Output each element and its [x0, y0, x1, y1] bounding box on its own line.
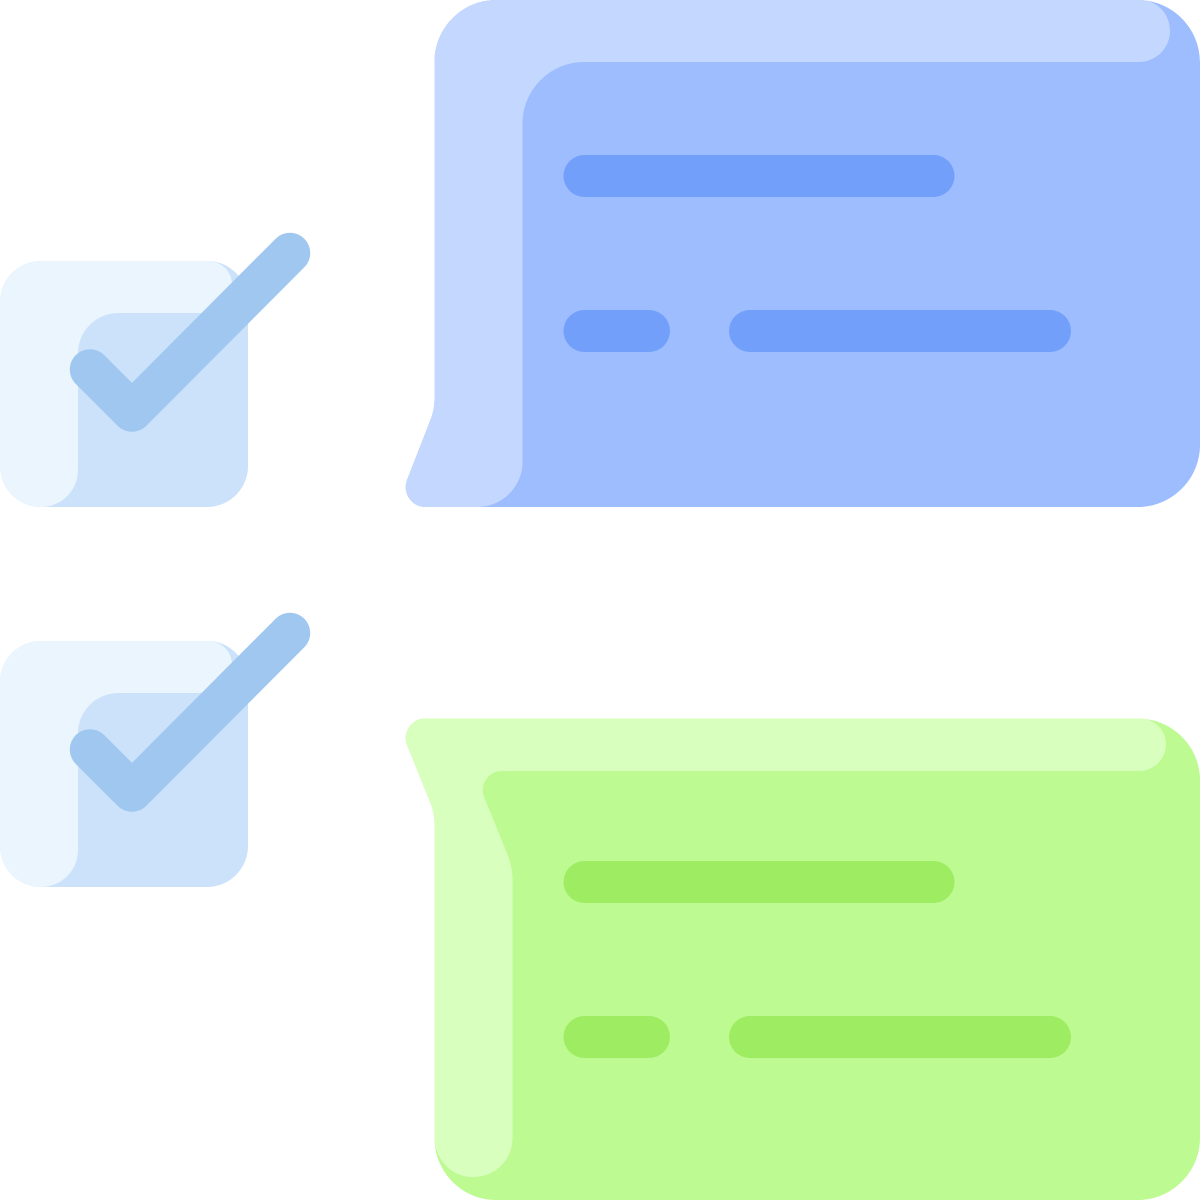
panel: blue speech bubble: [406, 0, 1200, 507]
icon: bottom checkbox with check: [0, 633, 290, 887]
text line: green short: [564, 1016, 670, 1058]
icon: top checkbox with check: [0, 253, 290, 507]
panel: green speech bubble: [406, 718, 1200, 1200]
text line: green first: [564, 861, 954, 903]
text line: blue short: [564, 310, 670, 352]
text line: blue long: [729, 310, 1071, 352]
text line: green long: [729, 1016, 1071, 1058]
text line: blue first: [564, 155, 954, 197]
